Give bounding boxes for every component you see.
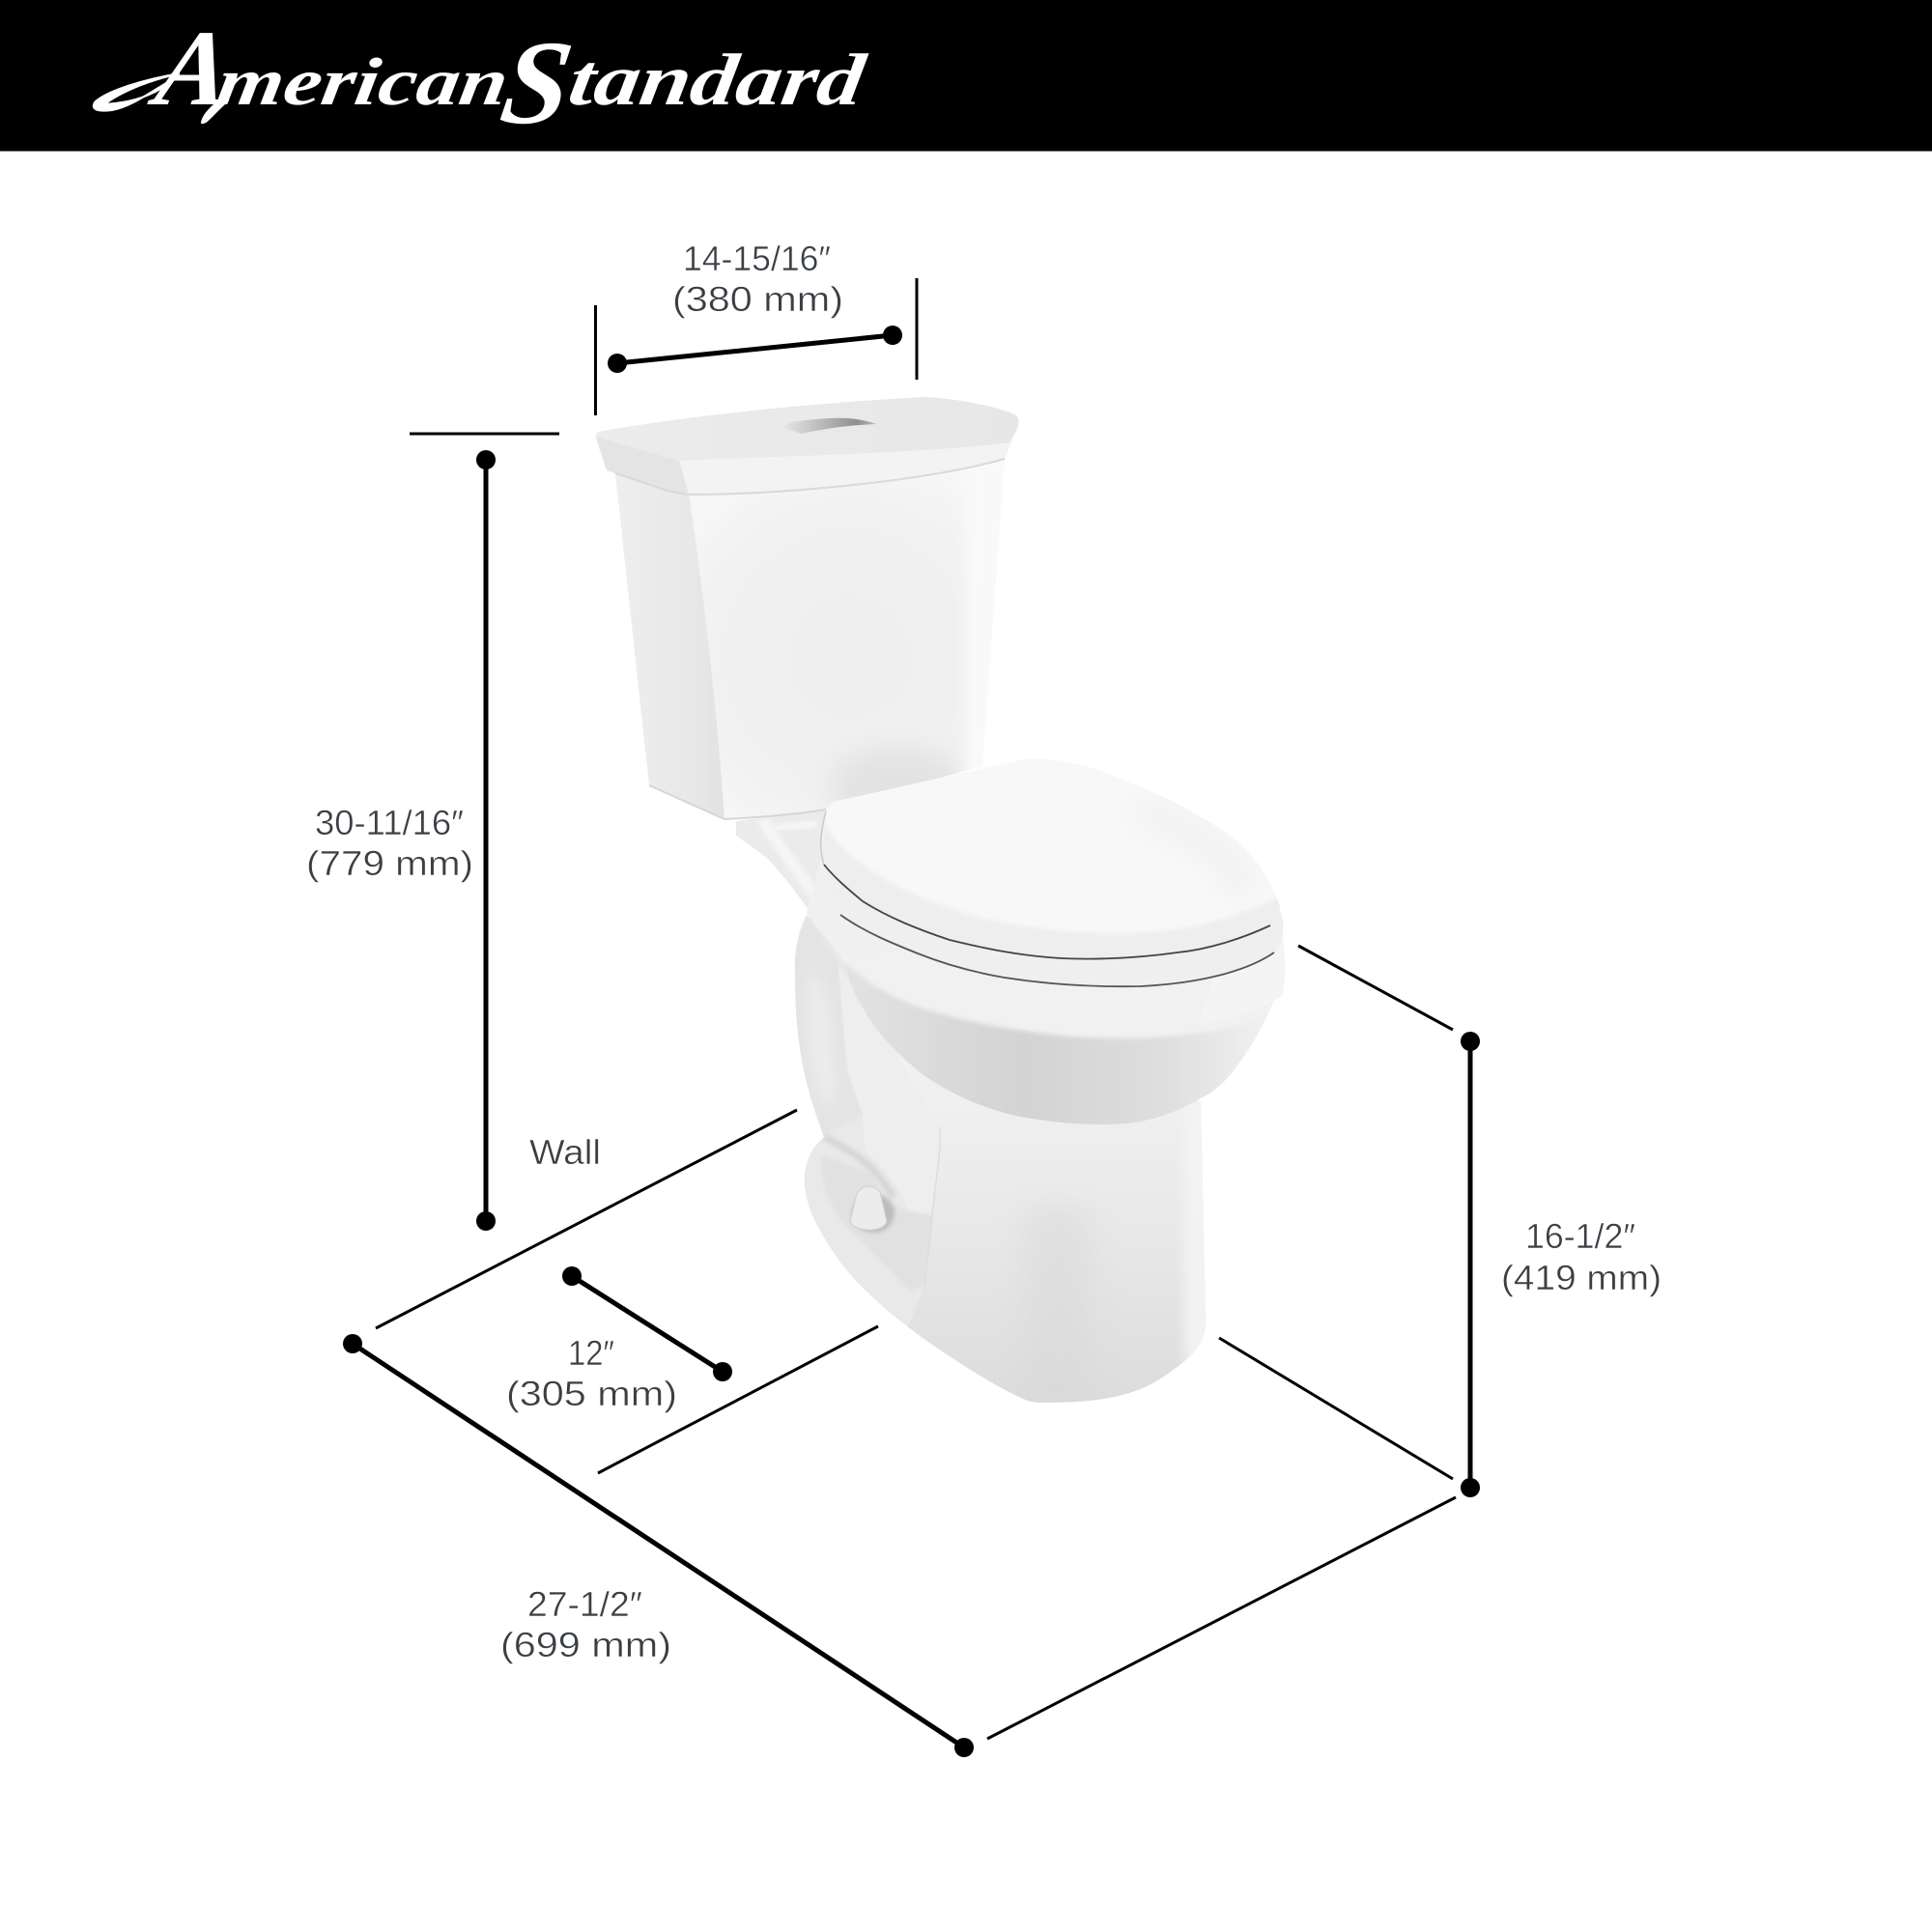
rough-in label: (305 mm) xyxy=(506,1374,677,1413)
tank width extension lines xyxy=(595,278,917,415)
logo wordmark: S xyxy=(494,16,581,149)
lid shadow line xyxy=(824,865,1270,959)
base recess xyxy=(908,1211,909,1212)
height label xyxy=(306,803,473,883)
floor reference line xyxy=(1219,1338,1453,1479)
tank width label: 14-15/16″ xyxy=(683,239,831,278)
toilet tank body xyxy=(615,472,970,820)
logo wordmark: tandard xyxy=(563,39,872,121)
side panel xyxy=(838,968,844,1020)
dimension: rough-in xyxy=(376,1110,878,1473)
seat top reference line xyxy=(1298,946,1453,1030)
logo wordmark: merican xyxy=(212,44,514,120)
depth bar xyxy=(343,1334,974,1757)
wall label: Wall xyxy=(529,1132,601,1172)
toilet bowl xyxy=(807,909,1286,1124)
dimension: overall depth xyxy=(343,1334,1456,1757)
lid inner shading xyxy=(1140,810,1241,894)
tank width bar xyxy=(608,326,902,373)
depth label: 27-1/2″ xyxy=(527,1584,642,1624)
flush button xyxy=(781,418,876,434)
lid lower band xyxy=(823,827,1280,958)
dimension: overall height xyxy=(306,434,559,1231)
mounting bolt cap xyxy=(850,1186,895,1233)
dimension: seat height xyxy=(1219,946,1662,1497)
rough-in label xyxy=(506,1333,677,1413)
height label: 30-11/16″ xyxy=(315,803,464,842)
tank left facet xyxy=(615,473,724,819)
toilet seat ring xyxy=(823,858,1283,986)
seat height label xyxy=(1501,1216,1662,1297)
height extension line xyxy=(410,433,559,435)
seat shadow line xyxy=(840,915,1274,986)
rear strip shading xyxy=(787,915,863,1137)
header band xyxy=(0,0,1932,151)
dimension: tank width xyxy=(595,239,917,415)
seat height label: 16-1/2″ xyxy=(1525,1216,1635,1256)
wall reference line xyxy=(376,1110,797,1328)
tank lid xyxy=(596,397,1019,495)
seat height bar xyxy=(1461,1032,1480,1497)
toilet pedestal and trapway xyxy=(794,915,1206,1403)
depth label xyxy=(500,1584,671,1664)
rim underside joining rear body xyxy=(807,860,947,976)
height bar xyxy=(476,450,496,1231)
tank width label xyxy=(672,239,843,319)
bolt reference line xyxy=(598,1326,878,1473)
logo wordmark: A xyxy=(143,10,240,128)
logo: American Standard xyxy=(94,10,877,149)
height label: (779 mm) xyxy=(306,843,473,883)
logo flourish on the A xyxy=(94,73,228,123)
toilet product image xyxy=(596,397,1294,1420)
depth label: (699 mm) xyxy=(500,1625,671,1664)
depth reference line xyxy=(987,1497,1456,1739)
tank width label: (380 mm) xyxy=(672,279,843,319)
pedestal front face xyxy=(908,1327,1184,1403)
rough-in label: 12″ xyxy=(568,1333,614,1373)
toilet neck connecting tank and bowl xyxy=(736,810,845,932)
toilet seat lid xyxy=(820,779,1280,960)
bowl rim xyxy=(847,960,1223,1039)
rough-in bar xyxy=(562,1266,732,1381)
seat height label: (419 mm) xyxy=(1501,1258,1662,1297)
